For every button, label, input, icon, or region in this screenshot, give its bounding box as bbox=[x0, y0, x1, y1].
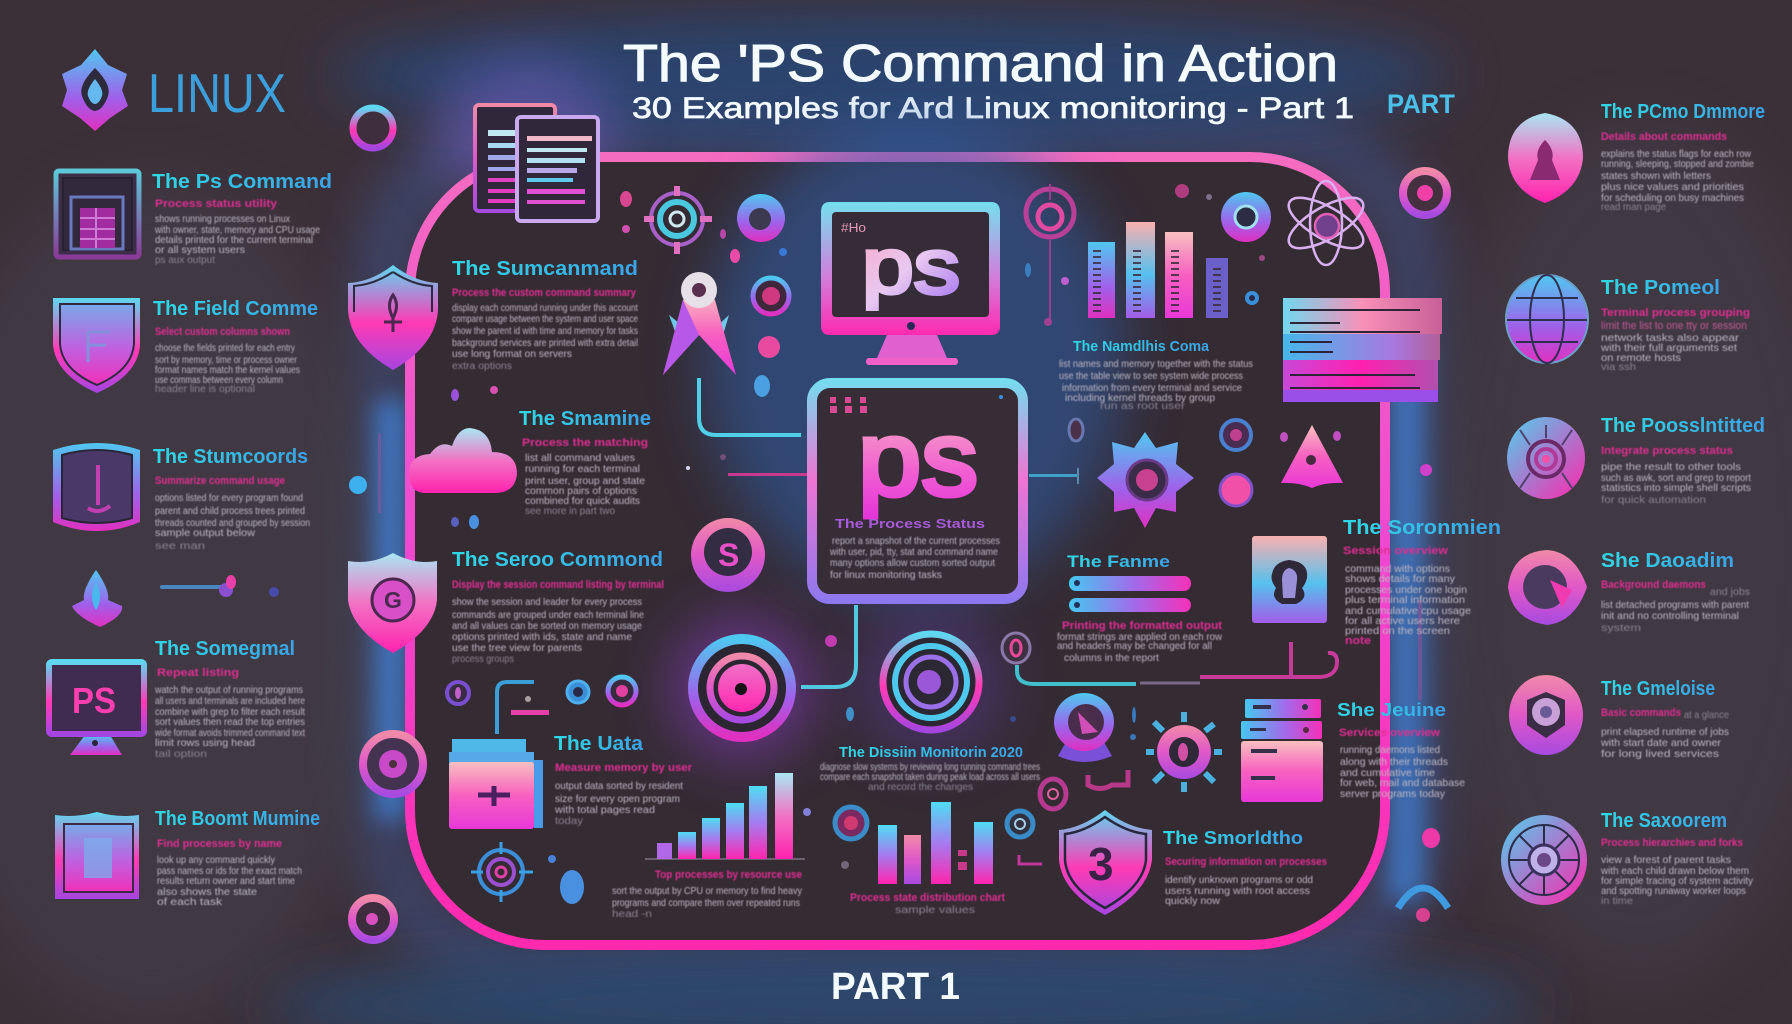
text block: Securing information on processes bbox=[1165, 856, 1327, 868]
frame: main rounded panel bbox=[410, 157, 1385, 945]
icon: numbered shield: 3 bbox=[1088, 838, 1114, 890]
panel: left item one bbox=[56, 171, 332, 266]
icon: shield bbox=[53, 298, 140, 393]
icon: small dots right bbox=[1206, 194, 1265, 305]
label: ps: ps bbox=[862, 222, 960, 310]
text block: print user, group and state bbox=[525, 475, 645, 487]
text block: Process the custom command summary bbox=[452, 287, 637, 299]
text block: Session overview bbox=[1343, 545, 1448, 557]
icon: small rings and connector row bbox=[447, 677, 636, 734]
text block: wide format avoids trimmed command text bbox=[154, 727, 305, 739]
text block: list names and memory together with the status bbox=[1059, 358, 1253, 370]
text block: Find processes by name bbox=[157, 838, 282, 850]
text block: of each task bbox=[157, 896, 223, 908]
text block: chart one caption: head -n bbox=[612, 908, 652, 920]
logo: linux bbox=[62, 49, 286, 131]
text block: Basic commands bbox=[1601, 707, 1681, 719]
text block: choose the fields printed for each entry bbox=[155, 342, 296, 354]
panel: central ps card bbox=[812, 383, 1023, 599]
arrow: zero ring connector bbox=[1002, 633, 1337, 684]
text block: combine with grep to filter each result bbox=[155, 706, 305, 718]
text block: with their full arguments set bbox=[1600, 342, 1737, 354]
icon: atom bbox=[1282, 181, 1370, 265]
text block: format names match the kernel values bbox=[155, 364, 300, 376]
icon: hex shield badge bbox=[1508, 550, 1587, 625]
icon: ps monitor bbox=[49, 662, 144, 755]
text block bbox=[154, 198, 320, 266]
text block: Process hierarchies and forks bbox=[1601, 837, 1743, 849]
text block bbox=[452, 579, 664, 665]
text block: diagnostics bbox=[820, 761, 1040, 793]
icon: ps monitor: PS bbox=[72, 680, 116, 721]
text block: printed on the screen bbox=[1345, 625, 1450, 637]
text block bbox=[1601, 445, 1751, 506]
icon: power ring top right bbox=[1026, 184, 1074, 320]
text block: shows running processes on Linux bbox=[155, 213, 291, 225]
heading: diagnostics block: The Dissiin Monitorin 2020 bbox=[839, 744, 1023, 761]
text block: parent and child process trees printed bbox=[155, 505, 305, 517]
text block bbox=[1339, 727, 1465, 800]
text block: and spotting runaway worker loops bbox=[1601, 885, 1746, 897]
text block: for simple tracing of system activity bbox=[1601, 875, 1754, 887]
icon: big target right bbox=[883, 634, 979, 730]
icon: nested square bbox=[56, 171, 139, 257]
heading: The Smorldtho bbox=[1163, 828, 1303, 848]
text block bbox=[1059, 358, 1253, 412]
icon: small gear bbox=[1146, 712, 1222, 792]
chart: rising bars bbox=[645, 773, 811, 860]
text block bbox=[154, 667, 305, 760]
icon: webcam bbox=[1054, 693, 1114, 762]
text block: including kernel threads by group bbox=[1065, 392, 1215, 404]
text block: quickly now bbox=[1165, 895, 1220, 907]
panel: left item two bbox=[53, 298, 318, 395]
text block: many options allow custom sorted output bbox=[830, 557, 995, 569]
text block: threads counted and grouped by session bbox=[155, 517, 310, 529]
text block: diagnostics: diagnose slow systems by reviewing long running command trees bbox=[820, 761, 1040, 773]
icon: camera badge bbox=[1509, 675, 1583, 755]
icon: badge bbox=[53, 443, 140, 531]
text block: and cumulative time bbox=[1340, 767, 1435, 779]
panel: right item two bbox=[1506, 275, 1750, 373]
text block: system bbox=[1601, 622, 1641, 634]
text block: see more in part two bbox=[525, 505, 615, 517]
text block: statistics into simple shell scripts bbox=[1601, 482, 1751, 494]
icon: s badge bbox=[691, 518, 765, 592]
icon: frame shield one bbox=[348, 265, 438, 370]
text block: list detached programs with parent bbox=[1601, 599, 1749, 611]
icon: top blue circle bbox=[737, 194, 785, 242]
chart: center bars bbox=[841, 802, 993, 884]
text block: Integrate process status bbox=[1601, 445, 1733, 457]
text block: Services overview bbox=[1339, 727, 1440, 739]
text block: chart one caption bbox=[612, 869, 803, 920]
text block: chart one caption: sort the output by CPU or memory to find heavy bbox=[612, 885, 803, 897]
text block bbox=[452, 287, 638, 372]
panel: heading block top center right bbox=[1059, 338, 1253, 412]
text block: Details about commands bbox=[1601, 131, 1727, 143]
text block bbox=[1057, 620, 1222, 664]
icon: cloud bbox=[409, 428, 517, 529]
panel: data block bbox=[449, 733, 693, 829]
arrow: connector from card to target bbox=[801, 605, 856, 687]
text block: sample output below bbox=[155, 527, 255, 539]
heading: The Gmeloise bbox=[1601, 678, 1715, 700]
text block: results return owner and start time bbox=[157, 875, 295, 887]
text block: on remote hosts bbox=[1601, 352, 1681, 364]
text block: explains the status flags for each row bbox=[1601, 148, 1751, 160]
icon: window dots bbox=[830, 395, 1003, 413]
text block: chart two caption bbox=[850, 892, 1005, 916]
text block bbox=[155, 326, 300, 395]
text block: information from every terminal and service bbox=[1062, 382, 1242, 394]
text block bbox=[554, 762, 693, 827]
icon: teal ring bbox=[1221, 192, 1271, 242]
heading: She Daoadim bbox=[1601, 550, 1734, 572]
text block: server programs today bbox=[1340, 788, 1446, 800]
text block: Background daemons bbox=[1601, 579, 1706, 591]
text block: plus nice values and priorities bbox=[1601, 181, 1744, 193]
icon: s badge: S bbox=[718, 537, 739, 573]
text block: Process the matching bbox=[522, 437, 648, 449]
icon: top ring with ticks bbox=[644, 186, 712, 254]
text block: commands are grouped under each terminal line bbox=[452, 609, 644, 621]
text block: with total pages read bbox=[554, 804, 655, 816]
heading: The Uata bbox=[554, 733, 644, 755]
text block: extra options bbox=[452, 360, 512, 372]
icon: droplet badge bbox=[1508, 113, 1583, 203]
text block: options listed for every program found bbox=[155, 492, 303, 504]
icon: keyhole card bbox=[1252, 536, 1327, 623]
text block: compare usage between the system and user space bbox=[452, 313, 638, 325]
panel: bars block bbox=[1057, 552, 1222, 664]
text block: via ssh bbox=[1601, 361, 1636, 373]
panel: right item six bbox=[1501, 810, 1754, 907]
text block: users running with root access bbox=[1165, 885, 1310, 897]
icon: window panel bbox=[1283, 298, 1442, 402]
panel: right item four bbox=[1508, 550, 1750, 634]
text block: at a glance bbox=[1684, 709, 1729, 721]
text block: running for each terminal bbox=[525, 463, 640, 475]
icon: frame ring bbox=[363, 734, 423, 794]
text block: chart two caption: sample values bbox=[895, 904, 975, 916]
icon: progress bars bbox=[1069, 576, 1191, 612]
icon: gear-side rings bbox=[1069, 419, 1252, 506]
text block: also shows the state bbox=[157, 886, 257, 898]
panel: top monitor: #Ho bbox=[841, 220, 866, 235]
text block: columns in the report bbox=[1064, 652, 1159, 664]
text block: for all active users here bbox=[1345, 615, 1460, 627]
text block: use commas between every column bbox=[155, 374, 283, 386]
icon: frame shield two: G bbox=[384, 587, 402, 613]
text block: chart one caption: Top processes by resource use bbox=[655, 869, 802, 881]
text block: size for every open program bbox=[555, 793, 680, 805]
panel: left item six bbox=[55, 808, 320, 908]
icon: numbered shield bbox=[1059, 810, 1152, 915]
text block: sort values then read the top entries bbox=[155, 716, 305, 728]
text block: limit rows using head bbox=[155, 737, 255, 749]
text block: Printing the formatted output bbox=[1062, 620, 1222, 632]
icon: chart side rings bbox=[835, 807, 1042, 864]
text block bbox=[157, 838, 302, 908]
text block: along with their threads bbox=[1340, 756, 1448, 768]
heading: The Fanme bbox=[1067, 552, 1170, 571]
text block: process groups bbox=[452, 653, 514, 665]
text block: Terminal process grouping bbox=[1601, 307, 1750, 319]
heading: The Stumcoords bbox=[153, 446, 308, 468]
text block: common pairs of options bbox=[525, 485, 637, 497]
text block: chart two caption: Process state distribution chart bbox=[850, 892, 1005, 904]
text block: display each command running under this account bbox=[452, 302, 638, 314]
text block: and jobs bbox=[1710, 586, 1750, 598]
panel: heading block mid left bbox=[452, 549, 664, 665]
arrow: ribbon to panel connector bbox=[699, 378, 801, 435]
icon: top-left ring bbox=[353, 108, 393, 148]
heading: The Ps Command bbox=[152, 171, 332, 193]
text block: all users and terminals are included here bbox=[155, 695, 305, 707]
icon: wheel badge bbox=[1501, 815, 1587, 905]
panel: right item one bbox=[1508, 101, 1765, 213]
text block: Measure memory by user bbox=[555, 762, 693, 774]
text block bbox=[1600, 837, 1754, 907]
panel: heading block top left bbox=[452, 258, 638, 372]
heading: The PCmo Dmmore bbox=[1601, 101, 1765, 123]
heading: The Seroo Commond bbox=[452, 549, 663, 571]
panel: left item five bbox=[49, 638, 305, 760]
text block: Process status utility bbox=[155, 198, 278, 210]
text block: for long lived services bbox=[1601, 748, 1719, 760]
text block bbox=[1165, 856, 1327, 907]
panel: right item five bbox=[1509, 675, 1729, 760]
text block: identify unknown programs or odd bbox=[1165, 874, 1313, 886]
chart: top bars bbox=[1088, 222, 1228, 318]
text block: states shown with letters bbox=[1601, 170, 1711, 182]
text block bbox=[1601, 131, 1754, 213]
text block: init and no controlling terminal bbox=[1601, 610, 1739, 622]
text block: tail option bbox=[155, 748, 207, 760]
icon: lock square bbox=[55, 812, 139, 899]
text block: combined for quick audits bbox=[525, 495, 640, 507]
text block: plus terminal information bbox=[1345, 594, 1465, 606]
text block: and headers may be changed for all bbox=[1057, 640, 1212, 652]
text block: header line is optional bbox=[155, 383, 255, 395]
text block: use the table view to see system wide process bbox=[1059, 370, 1243, 382]
panel: top monitor bbox=[821, 202, 1000, 365]
panel: server text bbox=[1337, 700, 1465, 800]
text block: pass names or ids for the exact match bbox=[157, 865, 302, 877]
text block: running, sleeping, stopped and zombie bbox=[1601, 158, 1754, 170]
icon: server stack bbox=[1241, 699, 1323, 802]
text block: output data sorted by resident bbox=[555, 780, 683, 792]
text block: options printed with ids, state and name bbox=[452, 631, 632, 643]
text block: diagnostics: compare each snapshot taken during peak load across all users bbox=[820, 771, 1040, 783]
text block bbox=[155, 475, 310, 552]
text block bbox=[829, 535, 1000, 581]
arrow: right connector bbox=[1029, 468, 1079, 484]
text block: in time bbox=[1601, 895, 1633, 907]
text block: read man page bbox=[1601, 201, 1666, 213]
text block: note bbox=[1345, 635, 1371, 647]
label: ps large: ps bbox=[858, 400, 978, 518]
text block: background services are printed with extra detail bbox=[452, 337, 638, 349]
text block: command with options bbox=[1345, 563, 1450, 575]
text block: use the tree view for parents bbox=[452, 642, 582, 654]
part tag: PART bbox=[1387, 89, 1455, 119]
heading: The Soronmien bbox=[1343, 517, 1501, 539]
icon: small pink dot bbox=[1420, 464, 1432, 476]
heading: The Process Status bbox=[835, 516, 985, 531]
text block: watch the output of running programs bbox=[154, 684, 303, 696]
text block bbox=[1343, 545, 1471, 647]
logo: linux: LINUX bbox=[148, 62, 286, 124]
text block: shows details for many bbox=[1345, 573, 1456, 585]
text block: and all values can be sorted on memory usage bbox=[452, 620, 642, 632]
text block: Repeat listing bbox=[157, 667, 239, 679]
text block: list all command values bbox=[525, 452, 635, 464]
icon: folder bbox=[449, 739, 543, 829]
text block: or all system users bbox=[155, 244, 245, 256]
icon: radial badge bbox=[1507, 417, 1585, 499]
text block: limit the list to one tty or session bbox=[1601, 320, 1747, 332]
heading: The Namdlhis Coma bbox=[1073, 338, 1210, 355]
text block: use long format on servers bbox=[452, 348, 572, 360]
icon: triangle bbox=[1280, 425, 1343, 488]
panel: left item three bbox=[53, 443, 310, 552]
text block: Select custom columns shown bbox=[155, 326, 290, 338]
text block: show the parent id with time and memory for tasks bbox=[452, 325, 638, 337]
panel: heading block right bbox=[1343, 517, 1501, 647]
text block: Display the session command listing by terminal bbox=[452, 579, 664, 591]
icon: document stack bbox=[475, 105, 598, 221]
text block: with start date and owner bbox=[1600, 737, 1722, 749]
text block: for quick automation bbox=[1601, 494, 1706, 506]
text block: for linux monitoring tasks bbox=[830, 569, 942, 581]
text block: chart one caption: programs and compare them over repeated runs bbox=[612, 897, 800, 909]
icon: right side dots bbox=[1398, 828, 1448, 922]
icon: gear bbox=[1097, 432, 1194, 528]
heading: The Boomt Mumine bbox=[155, 808, 320, 830]
text block: today bbox=[555, 815, 584, 827]
text block: and cumulative cpu usage bbox=[1345, 605, 1471, 617]
heading: The Sumcanmand bbox=[452, 258, 638, 280]
text block: Summarize command usage bbox=[155, 475, 285, 487]
text block: network tasks also appear bbox=[1601, 332, 1740, 344]
panel: shield text bbox=[1163, 828, 1327, 907]
text block: run as root user bbox=[1100, 400, 1186, 412]
text block bbox=[1601, 579, 1750, 634]
panel: right item three bbox=[1507, 415, 1765, 506]
icon: top right pink ring bbox=[1403, 171, 1447, 215]
text block: processes under one login bbox=[1345, 584, 1467, 596]
icon: side rings bbox=[753, 278, 789, 397]
text block: look up any command quickly bbox=[157, 854, 276, 866]
text block: for web, mail and database bbox=[1340, 777, 1465, 789]
icon: ribbon bbox=[663, 272, 736, 375]
icon: small side dots bbox=[1025, 184, 1189, 326]
text block: diagnostics: and record the changes bbox=[868, 781, 973, 793]
icon: pink squiggle and ring bbox=[1040, 707, 1136, 809]
icon: small dots bbox=[451, 386, 498, 401]
icon: blue drop bbox=[548, 855, 584, 904]
footer label: PART 1 bbox=[831, 966, 960, 1008]
text block: print elapsed runtime of jobs bbox=[1601, 726, 1729, 738]
text block: ps aux output bbox=[155, 254, 215, 266]
text block: for scheduling on busy machines bbox=[1601, 192, 1744, 204]
subtitle: 30 Examples for Ard Linux monitoring - Part 1 bbox=[632, 92, 1354, 125]
heading: The Smamine bbox=[519, 408, 651, 430]
heading: The Pomeol bbox=[1601, 277, 1720, 299]
icon: scattered dots bbox=[620, 191, 787, 263]
text block: details printed for the current terminal bbox=[155, 234, 313, 246]
icon: frame shield two bbox=[348, 553, 437, 653]
text block bbox=[1600, 307, 1750, 373]
heading: The Saxoorem bbox=[1601, 810, 1727, 832]
icon: target bbox=[471, 842, 533, 902]
text block: view a forest of parent tasks bbox=[1601, 854, 1731, 866]
title: The 'PS Command in Action bbox=[623, 35, 1338, 93]
text block: report a snapshot of the current processes bbox=[832, 535, 1000, 547]
icon: blue dot bbox=[349, 476, 367, 494]
heading: She Jeuine bbox=[1337, 700, 1446, 720]
text block: format strings are applied on each row bbox=[1057, 631, 1222, 643]
icon: globe bbox=[1506, 275, 1588, 363]
text block bbox=[522, 437, 648, 517]
panel: cloud block bbox=[409, 408, 651, 529]
text block: with each child drawn below them bbox=[1600, 865, 1749, 877]
text block bbox=[1600, 707, 1729, 760]
text block: running daemons listed bbox=[1340, 744, 1440, 756]
icon: slider line bbox=[160, 575, 279, 597]
text block: such as awk, sort and grep to report bbox=[1601, 472, 1751, 484]
heading: The Poosslntitted bbox=[1601, 415, 1765, 437]
heading: The Field Comme bbox=[153, 298, 318, 320]
text block: see man bbox=[155, 540, 205, 552]
heading: The Somegmal bbox=[155, 638, 295, 660]
arrow: pink connector bbox=[686, 454, 807, 476]
icon: lower-left ring bbox=[352, 898, 394, 940]
text block: with owner, state, memory and CPU usage bbox=[154, 224, 320, 236]
text block: sort by memory, time or process owner bbox=[155, 354, 297, 366]
icon: big target left bbox=[693, 639, 791, 737]
text block: pipe the result to other tools bbox=[1601, 461, 1741, 473]
icon: connector dots bbox=[825, 635, 1016, 722]
icon: droplet bbox=[72, 570, 122, 627]
text block: show the session and leader for every process bbox=[452, 596, 642, 608]
text block: with user, pid, tty, stat and command name bbox=[829, 546, 998, 558]
